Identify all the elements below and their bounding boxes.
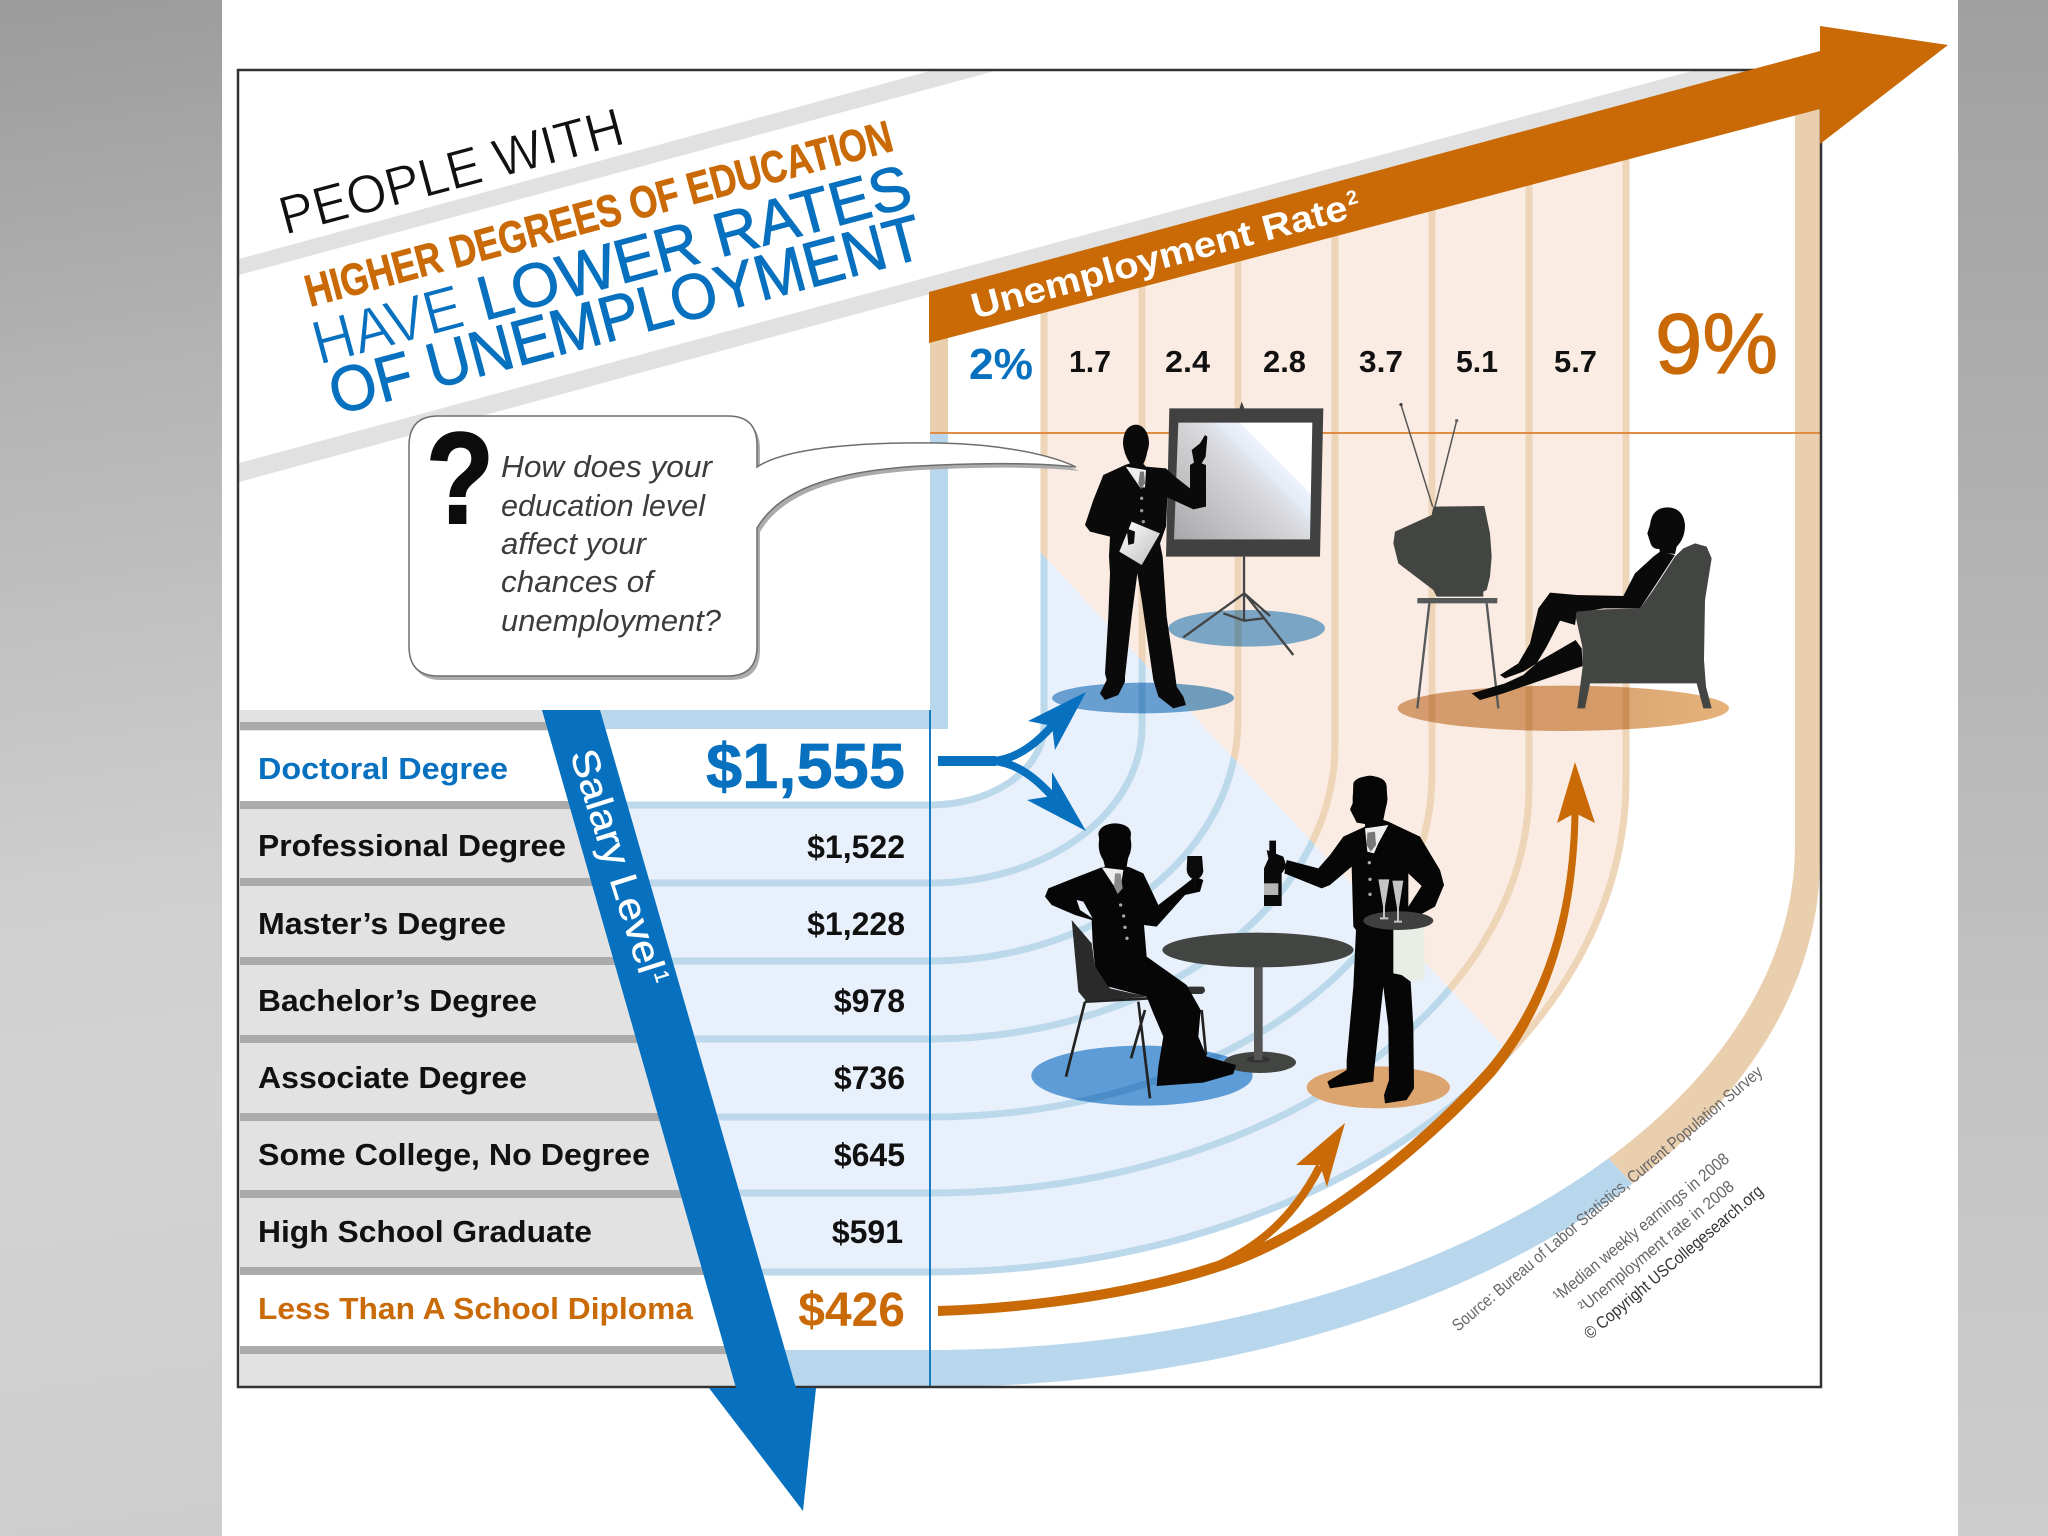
unemployment rate values <box>969 297 1778 392</box>
vertical blue rule <box>929 710 931 1387</box>
source notes: © Copyright USCollegesearch.org <box>1580 1181 1767 1343</box>
salary values: $1,522 <box>807 829 905 865</box>
scene: presenter at projection screen <box>1052 402 1325 713</box>
salary values <box>706 730 905 1337</box>
degree labels: Bachelor’s Degree <box>258 983 537 1018</box>
unemployment rate values: 5.1 <box>1456 344 1498 379</box>
degree labels: Associate Degree <box>258 1060 527 1095</box>
salary values: $591 <box>832 1214 903 1250</box>
title line: have lower rates: HAVE <box>305 272 470 379</box>
salary values: $645 <box>834 1137 905 1173</box>
source notes: Source: Bureau of Labor Statistics, Current Population Survey <box>1448 1062 1766 1335</box>
speech bubble <box>409 405 1079 680</box>
arrow: orange forked salary arrow <box>938 762 1595 1316</box>
background: left grey band <box>0 0 222 1536</box>
title diagonal grey bands <box>239 71 1750 482</box>
salary values: $978 <box>834 983 905 1019</box>
salary level label: Salary Level <box>561 744 671 978</box>
salary level label: 1 <box>649 968 673 985</box>
unemployment rate values: 5.7 <box>1554 344 1597 379</box>
unemployment rate values: 9% <box>1655 297 1778 392</box>
degree labels <box>258 751 694 1326</box>
degree labels: Some College, No Degree <box>258 1137 650 1172</box>
bubble text: unemployment? <box>501 603 722 638</box>
title line: higher degrees of education: HIGHER DEGREES OF EDUCATION <box>299 111 898 317</box>
title line: have lower rates <box>305 152 919 379</box>
scene: waiter with tray and bottle <box>1264 776 1450 1108</box>
arrow label: unemployment rate: 2 <box>1344 186 1360 210</box>
icon: question mark: ? <box>426 405 494 551</box>
salary values: $426 <box>798 1284 905 1337</box>
title line: of unemployment: OF UNEMPLOYMENT <box>321 201 930 429</box>
salary table left column <box>240 710 736 1386</box>
curved column and row bands <box>560 90 1820 1387</box>
chart background: peach and blue area <box>560 132 1626 1272</box>
unemployment rate values: 2.8 <box>1263 344 1306 379</box>
salary values: $736 <box>834 1060 905 1096</box>
title line: have lower rates: LOWER RATES <box>470 152 919 334</box>
salary level arrow <box>542 710 816 1511</box>
degree labels: Master’s Degree <box>258 906 506 941</box>
orange horizontal rule <box>930 432 1820 434</box>
unemployment rate values: 2% <box>969 340 1033 389</box>
degree labels: Doctoral Degree <box>258 751 508 786</box>
salary values: $1,228 <box>807 906 905 942</box>
scene: person watching television <box>1393 403 1729 731</box>
bubble text: How does your <box>501 449 714 484</box>
title <box>273 97 930 429</box>
arrow label: unemployment rate: Unemployment Rate <box>966 187 1352 327</box>
degree labels: Professional Degree <box>258 828 566 863</box>
unemployment rate values: 2.4 <box>1165 344 1211 379</box>
bubble text <box>501 449 722 638</box>
source notes: ²Unemployment rate in 2008 <box>1574 1177 1738 1316</box>
arrow: blue forked salary arrow <box>938 692 1086 831</box>
salary values: $1,555 <box>706 730 905 802</box>
title line: people with: PEOPLE WITH <box>273 97 630 247</box>
bubble text: affect your <box>501 526 648 561</box>
frame <box>238 70 1821 1387</box>
degree labels: Less Than A School Diploma <box>258 1291 694 1326</box>
unemployment rate arrow <box>929 26 1948 343</box>
bubble text: chances of <box>501 564 656 599</box>
bubble text: education level <box>501 488 706 523</box>
scene: seated diner at table <box>1031 823 1354 1106</box>
unemployment rate values: 3.7 <box>1359 344 1403 379</box>
unemployment rate values: 1.7 <box>1069 344 1111 379</box>
background: right grey band <box>1958 0 2048 1536</box>
degree labels: High School Graduate <box>258 1214 592 1249</box>
source notes: ¹Median weekly earnings in 2008 <box>1549 1149 1733 1305</box>
